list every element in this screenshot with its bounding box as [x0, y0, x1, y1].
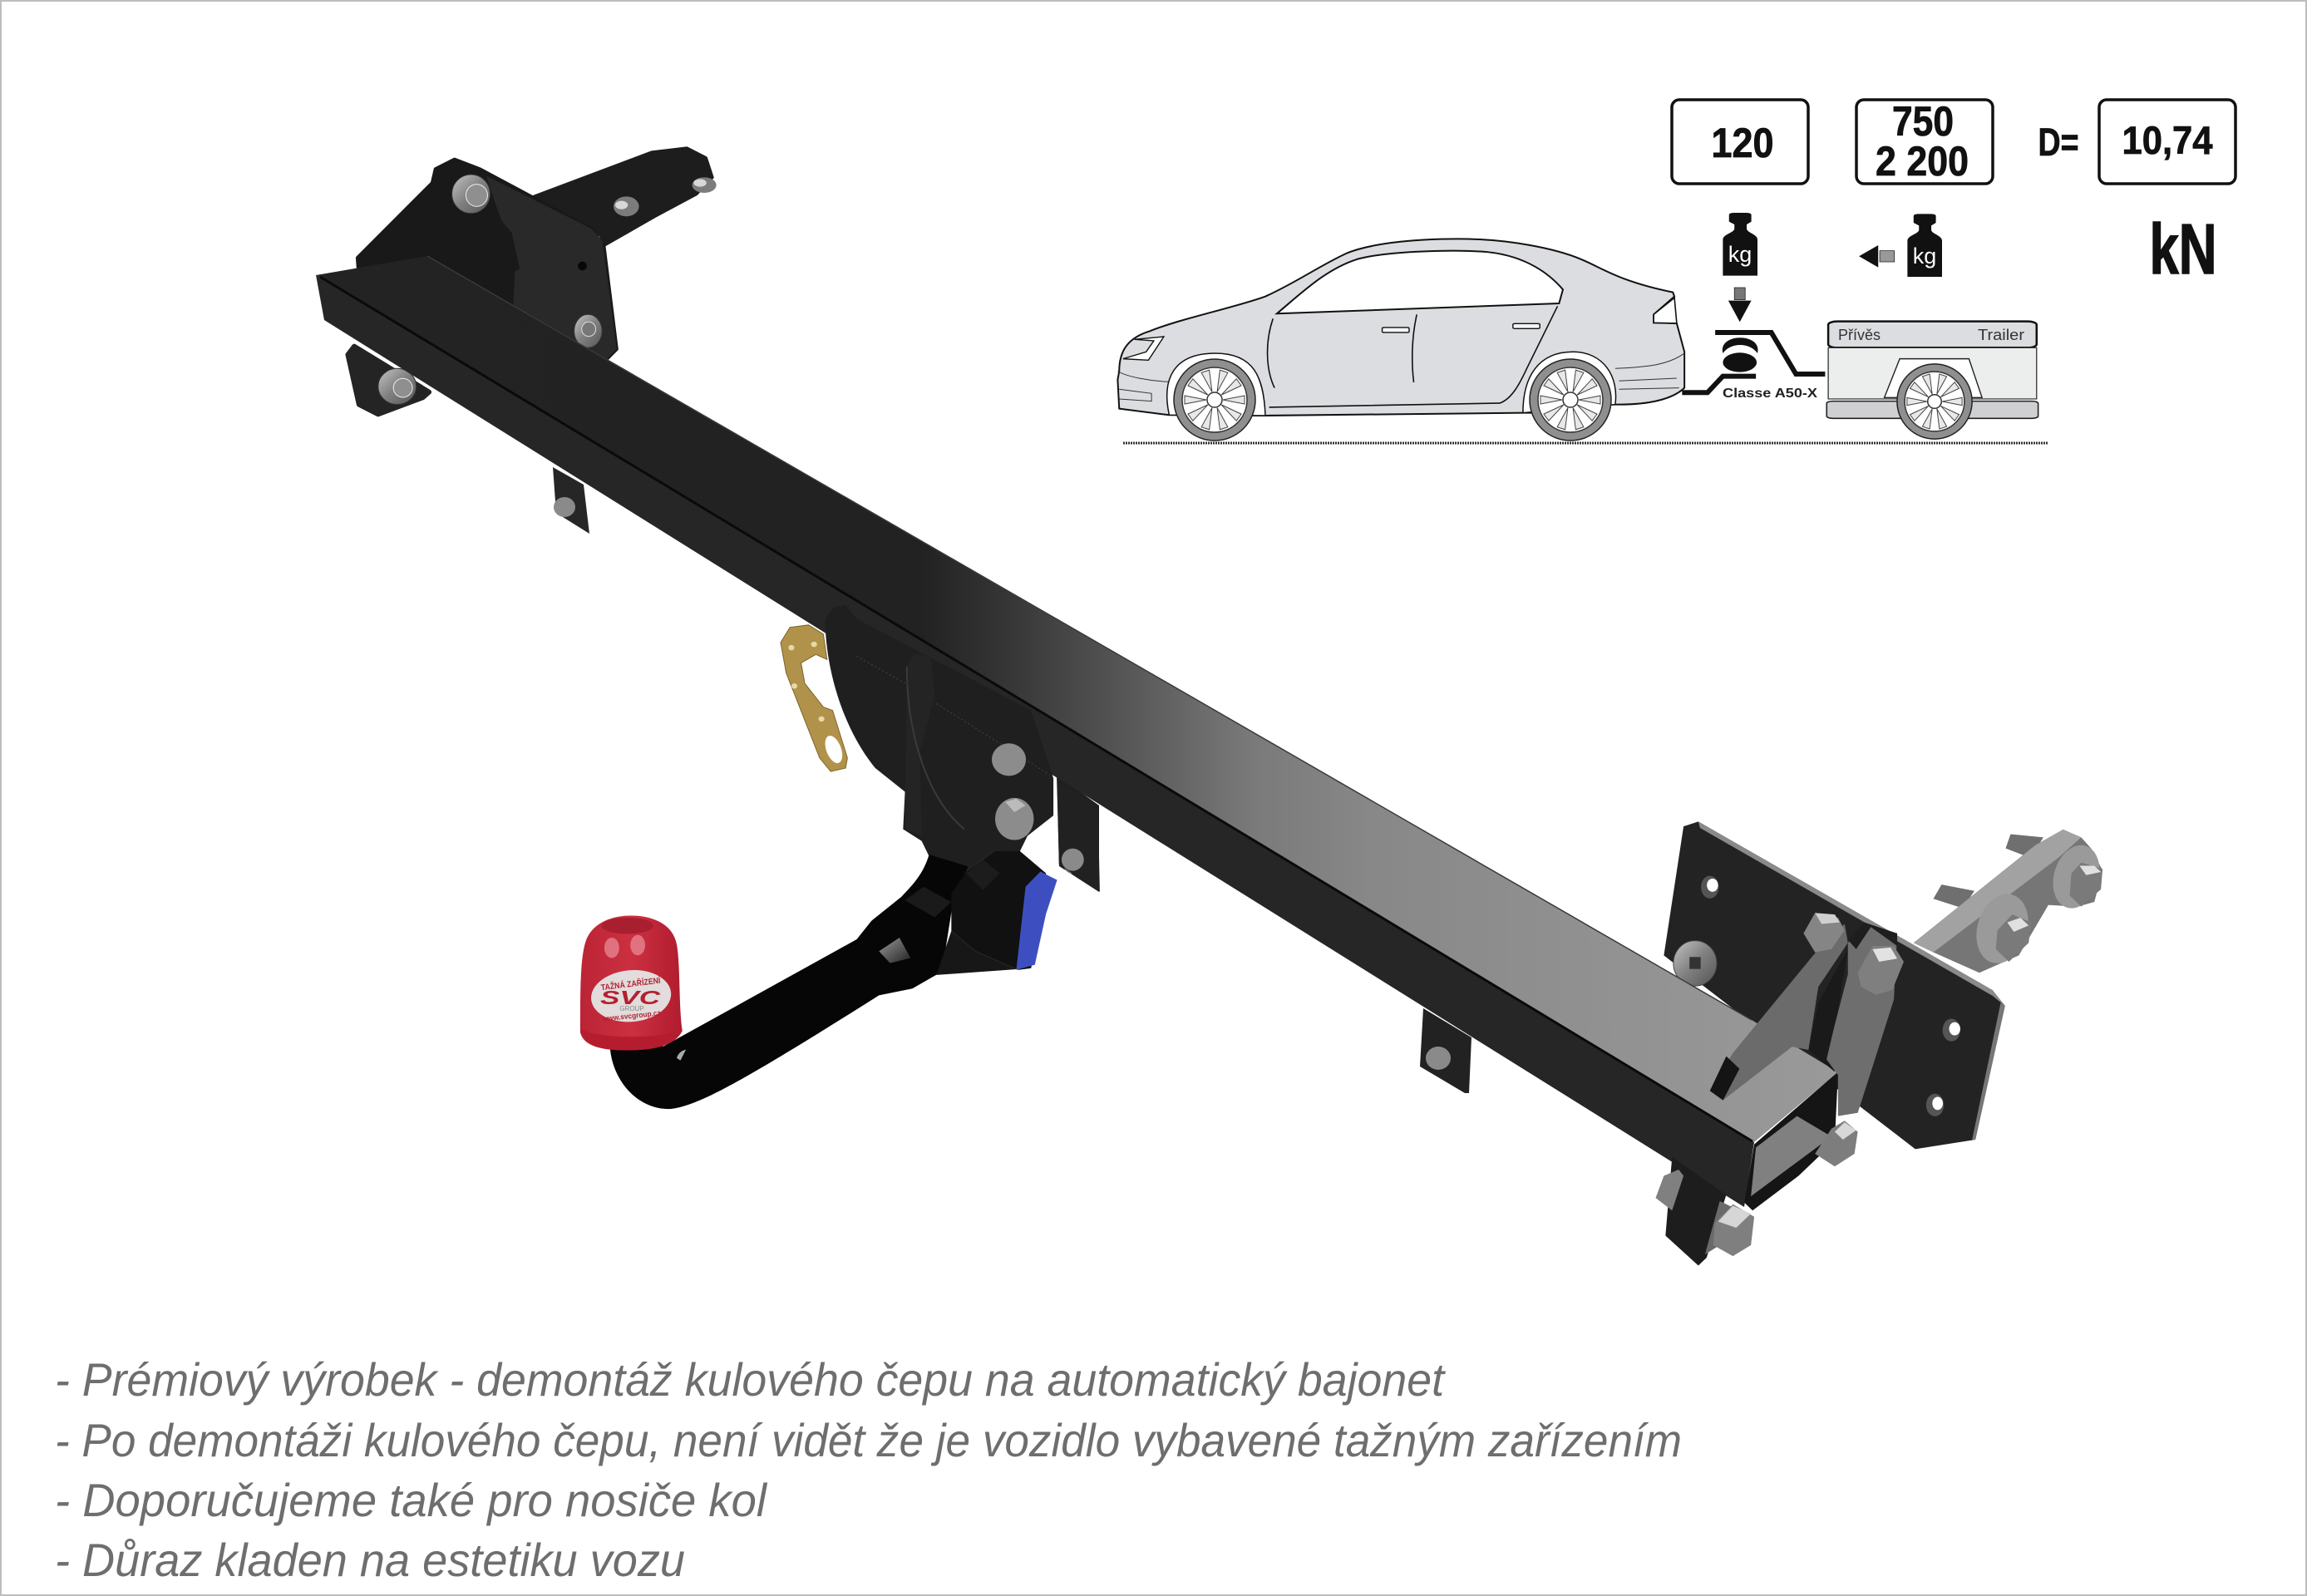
front wheel [1174, 359, 1255, 441]
car [1117, 239, 1684, 416]
box: towing mass: 750 [1892, 98, 1954, 145]
label Přívěs: Přívěs [1838, 327, 1881, 343]
red ball cap: TAŽNÁ ZAŘÍZENÍ [600, 975, 661, 993]
icon: towing mass weight: kg [1913, 244, 1936, 268]
icon: vertical load weight: kg [1728, 242, 1752, 267]
rear wheel [1530, 359, 1611, 441]
mounting tabs [553, 467, 1471, 1093]
box: D value [2099, 100, 2236, 184]
tow bar assembly [316, 148, 2107, 1266]
hitch symbol [1682, 332, 1825, 392]
label Trailer: Trailer [1978, 327, 2024, 343]
line 4: - Důraz kladen na estetiku vozu [55, 1534, 685, 1586]
red ball cap [580, 915, 683, 1050]
box: vertical load: 120 [1711, 120, 1774, 166]
D value label: D= [2038, 120, 2078, 164]
box: D value: 10,74 [2122, 118, 2213, 162]
box: vertical load [1672, 100, 1808, 184]
red ball cap: SVC [600, 987, 661, 1008]
red ball cap: www.svcgroup.cz [601, 1008, 661, 1023]
box: towing mass: 2 200 [1876, 138, 1969, 185]
coupling class label: Classe A50-X [1723, 387, 1817, 401]
box: towing mass [1856, 98, 1993, 185]
ball arm bracket [610, 605, 1100, 1109]
line 3: - Doporučujeme také pro nosiče kol [55, 1474, 768, 1526]
icon: towing mass weight [1859, 214, 1942, 277]
line 2: - Po demontáži kulového čepu, není vidět že je vozidlo vybavené tažným zařízením [55, 1414, 1682, 1466]
right mounting plate [1664, 821, 2107, 1149]
red ball cap: GROUP [619, 1005, 644, 1012]
line 1: - Prémiový výrobek - demontáž kulového čepu na automatický bajonet [55, 1353, 1446, 1406]
icon: vertical load weight [1723, 213, 1757, 322]
left mounting bracket [348, 148, 717, 414]
product description [55, 1353, 1682, 1586]
spec boxes [1672, 98, 2236, 289]
trailer [1826, 322, 2038, 439]
crossbar beam [316, 256, 1838, 1207]
right end of beam with ears and bolts [1656, 913, 1904, 1266]
ground line [1123, 442, 2048, 444]
car and trailer diagram [1117, 213, 2048, 443]
blue release handle [1016, 871, 1057, 970]
unit kN: kN [2150, 210, 2216, 289]
